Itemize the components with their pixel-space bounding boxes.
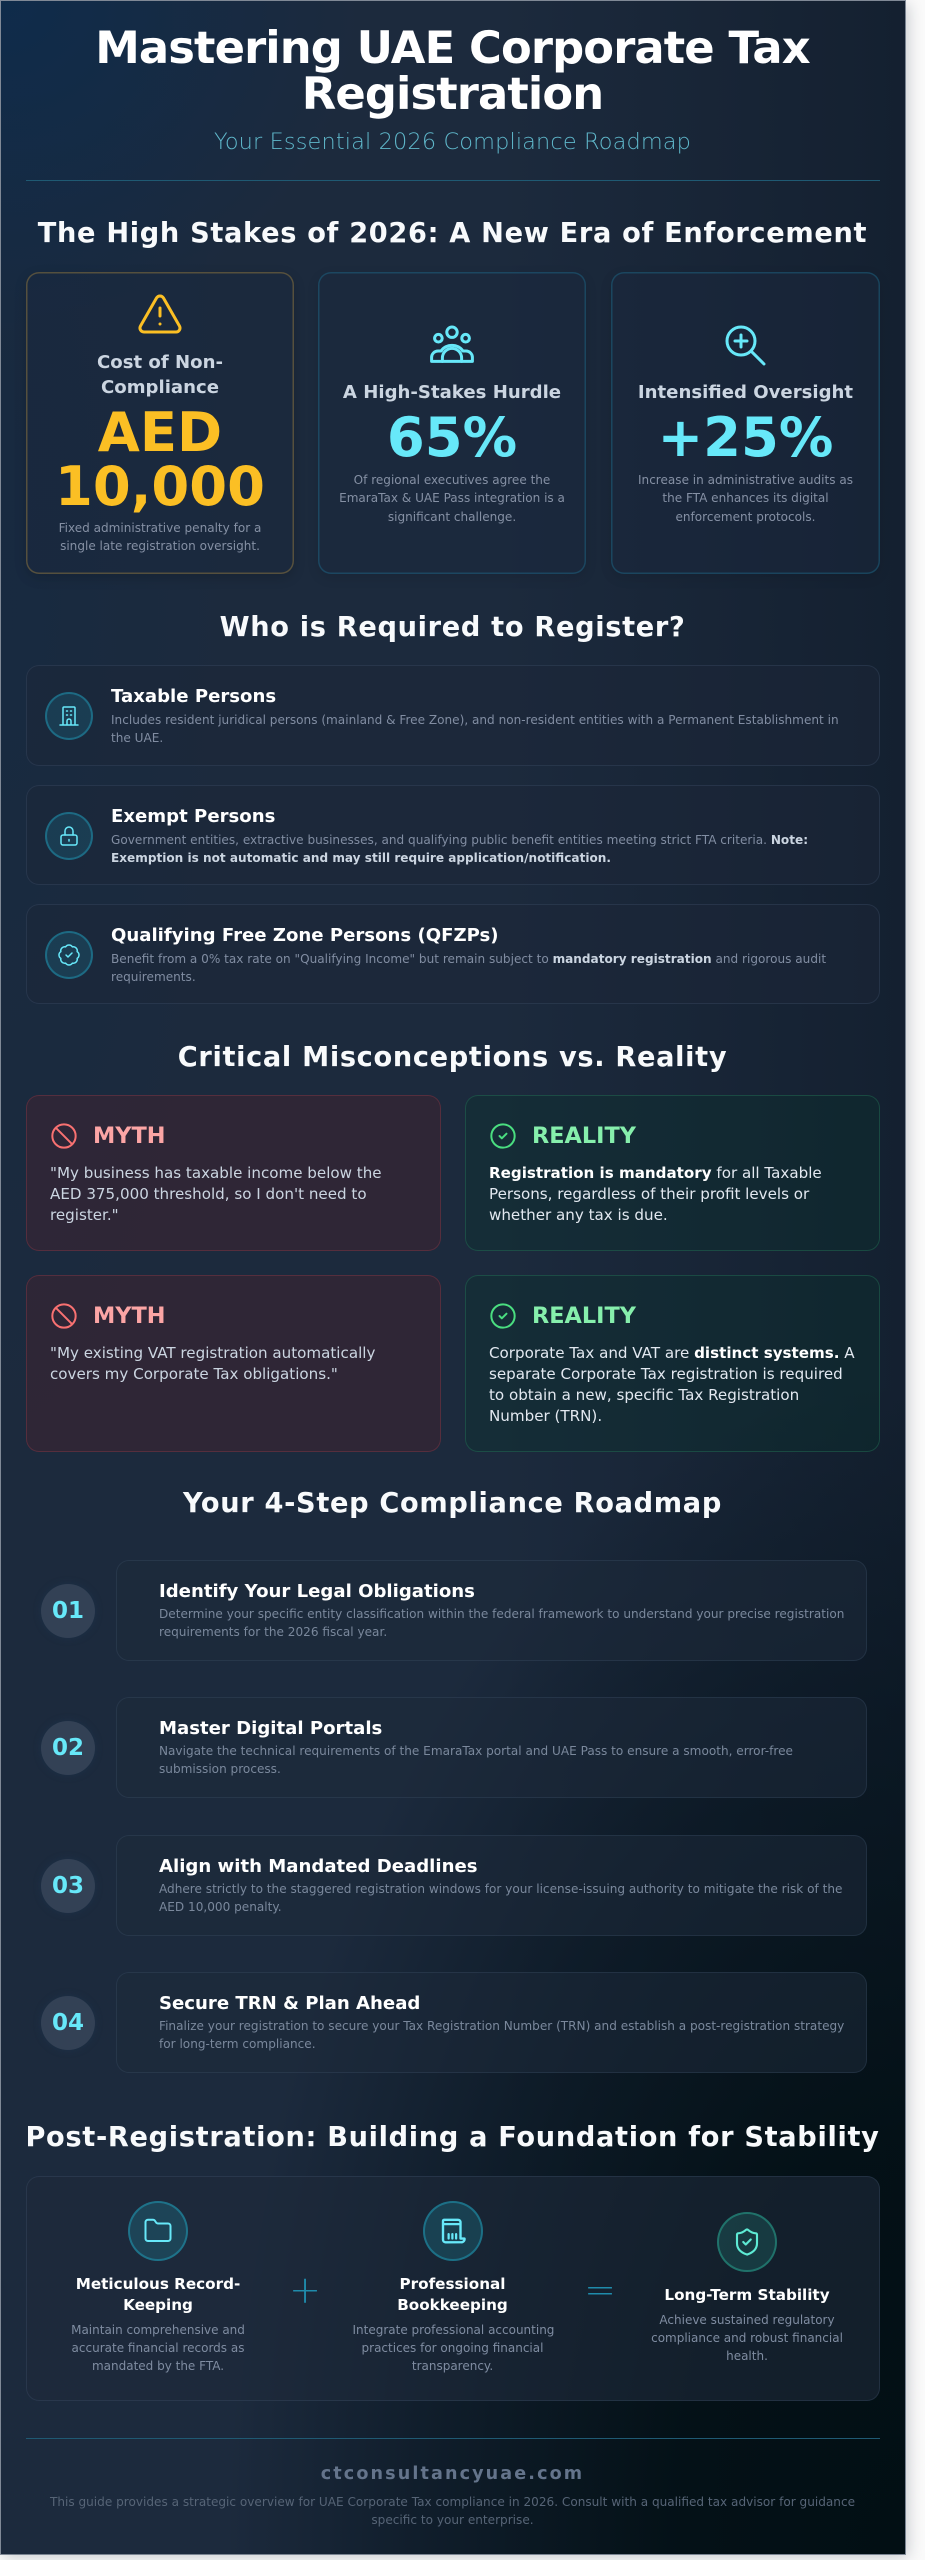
reality label: REALITY [532, 1123, 636, 1149]
reality text: Number (TRN). [489, 1407, 602, 1425]
panel: cost of non-compliance [26, 272, 294, 574]
panel: reality 1 [465, 1095, 880, 1251]
panel: myth 2 [26, 1275, 441, 1452]
step number 04: 04 [52, 2010, 84, 2036]
reality text: Persons, regardless of their profit levels or [489, 1185, 809, 1203]
icon: check circle [490, 1123, 516, 1149]
row title: Exempt Persons [111, 806, 275, 826]
item title: Long-Term Stability [664, 2286, 830, 2304]
icon: folder [128, 2201, 188, 2261]
item title: Bookkeeping [397, 2296, 508, 2314]
step number 03: 03 [52, 1873, 84, 1899]
icon: ban [51, 1303, 77, 1329]
icon: check circle [490, 1303, 516, 1329]
icon: ledger [422, 2201, 482, 2261]
item title [76, 2274, 240, 2314]
step number 02: 02 [52, 1735, 84, 1761]
item title [397, 2274, 508, 2314]
equals operator: = [584, 2268, 616, 2312]
myth label: MYTH [93, 1303, 166, 1329]
stat value: +25% [658, 406, 833, 469]
step number 01 [41, 1584, 95, 1638]
row description [111, 833, 808, 865]
step description: Determine your specific entity classification within the federal framework to understand your precise registration [159, 1607, 844, 1621]
row description: Includes resident juridical persons (mainland & Free Zone), and non-resident entities with a Permanent Establishment in [111, 713, 839, 727]
reality text [489, 1164, 822, 1224]
step description [159, 1607, 844, 1639]
plus operator: + [289, 2268, 321, 2312]
step number 01: 01 [52, 1598, 84, 1624]
stat description: single late registration oversight. [60, 539, 260, 553]
stat description [638, 473, 853, 524]
reality text: Registration is mandatory for all Taxable [489, 1164, 822, 1182]
panel: intensified oversight [611, 272, 880, 574]
panel: post-registration equation [26, 2176, 880, 2401]
title: Mastering UAE Corporate Tax [95, 21, 810, 74]
item: stability [651, 2212, 843, 2363]
myth text: "My existing VAT registration automatically [50, 1344, 375, 1362]
stat description: Increase in administrative audits as [638, 473, 853, 487]
panel: taxable persons [26, 665, 880, 766]
step description: for long-term compliance. [159, 2037, 316, 2051]
panel: reality 2 [465, 1275, 880, 1452]
row description: Benefit from a 0% tax rate on "Qualifying Income" but remain subject to mandatory registration and rigorous audit [111, 952, 826, 966]
row title: Taxable Persons [111, 686, 276, 706]
stat value: 65% [387, 406, 517, 469]
row title: Qualifying Free Zone Persons (QFZPs) [111, 924, 499, 946]
title [95, 21, 810, 120]
stat label: Intensified Oversight [638, 382, 853, 403]
step title: Master Digital Portals [159, 1718, 382, 1738]
myth text [50, 1344, 375, 1383]
item description [651, 2313, 843, 2363]
reality text: separate Corporate Tax registration is required [489, 1365, 843, 1383]
heading: roadmap: Your 4-Step Compliance Roadmap [183, 1488, 722, 1518]
stat description: enforcement protocols. [676, 510, 815, 524]
reality text [489, 1344, 855, 1425]
icon: ban [51, 1123, 77, 1149]
row description [111, 952, 826, 984]
item description: Maintain comprehensive and [71, 2323, 245, 2337]
step title: Identify Your Legal Obligations [159, 1580, 475, 1602]
footer: disclaimer: specific to your enterprise. [371, 2513, 534, 2527]
stat description: Of regional executives agree the [354, 473, 550, 487]
myth label: MYTH [93, 1123, 166, 1149]
item description: practices for ongoing financial [362, 2341, 543, 2355]
stat value [55, 400, 265, 518]
icon: building [45, 692, 93, 740]
row description: the UAE. [111, 731, 163, 745]
step description: requirements for the 2026 fiscal year. [159, 1625, 387, 1639]
panel: high-stakes hurdle [318, 272, 586, 574]
item: record-keeping [71, 2201, 245, 2373]
item description: health. [726, 2349, 768, 2363]
stat label: A High-Stakes Hurdle [343, 382, 561, 403]
step description: AED 10,000 penalty. [159, 1900, 282, 1914]
stat description: EmaraTax & UAE Pass integration is a [339, 491, 565, 505]
subtitle: Your Essential 2026 Compliance Roadmap [214, 129, 691, 155]
step card 2 [116, 1697, 867, 1798]
icon: shield check [717, 2212, 777, 2272]
heading: post-registration: Post-Registration: Building a Foundation for Stability [25, 2122, 880, 2152]
item description: accurate financial records as [72, 2341, 244, 2355]
footer: website: ctconsultancyuae.com [321, 2464, 584, 2484]
row description: Exemption is not automatic and may still require application/notification. [111, 851, 611, 865]
item title: Professional [400, 2274, 505, 2292]
step card 3 [116, 1835, 867, 1936]
step card 4 [116, 1972, 867, 2073]
item description [71, 2323, 245, 2373]
heading: high stakes: The High Stakes of 2026: A New Era of Enforcement [38, 218, 867, 248]
stat label [97, 352, 223, 398]
step card 1 [116, 1560, 867, 1661]
item title: Keeping [123, 2296, 193, 2314]
step number 02 [41, 1721, 95, 1775]
step title: Align with Mandated Deadlines [159, 1856, 478, 1876]
title: Registration [302, 67, 603, 120]
reality text: Corporate Tax and VAT are distinct systems. A [489, 1344, 855, 1362]
item description: transparency. [412, 2359, 493, 2373]
panel: qualifying free zone persons [26, 904, 880, 1004]
stat label: Compliance [101, 376, 219, 398]
icon: people group [430, 326, 474, 363]
myth text [50, 1164, 382, 1224]
step description: Navigate the technical requirements of the EmaraTax portal and UAE Pass to ensure a smooth, error-free [159, 1744, 793, 1758]
stat label: Cost of Non- [97, 352, 223, 372]
step number 04 [41, 1996, 95, 2050]
icon: warning triangle [138, 294, 182, 334]
icon: magnifier [726, 326, 766, 366]
row description: requirements. [111, 970, 196, 984]
myth text: register." [50, 1206, 119, 1224]
stat value: 10,000 [55, 454, 265, 518]
step description: Adhere strictly to the staggered registration windows for your license-issuing authority to mitigate the risk of the [159, 1882, 842, 1896]
footer: disclaimer: This guide provides a strategic overview for UAE Corporate Tax compliance in 2026. Consult with a qualified tax advisor for guidance [50, 2495, 855, 2509]
step description: submission process. [159, 1762, 281, 1776]
stat description [59, 521, 261, 553]
stat description: Fixed administrative penalty for a [59, 521, 261, 535]
item description: mandated by the FTA. [92, 2359, 224, 2373]
step description: Finalize your registration to secure your Tax Registration Number (TRN) and establish a post-registration strategy [159, 2019, 844, 2033]
reality text: to obtain a new, specific Tax Registration [489, 1386, 799, 1404]
panel: exempt persons [26, 785, 880, 885]
myth text: AED 375,000 threshold, so I don't need to [50, 1185, 367, 1203]
step number 03 [41, 1859, 95, 1913]
step description [159, 1882, 842, 1914]
stat description: significant challenge. [388, 510, 516, 524]
stat description [339, 473, 565, 524]
heading: who must register: Who is Required to Register? [220, 612, 685, 642]
icon: badge check [45, 931, 93, 979]
step description [159, 1744, 793, 1776]
item description: Achieve sustained regulatory [659, 2313, 835, 2327]
heading: misconceptions: Critical Misconceptions vs. Reality [178, 1042, 727, 1072]
myth text: covers my Corporate Tax obligations." [50, 1365, 338, 1383]
row description: Government entities, extractive businesses, and qualifying public benefit entities meeting strict FTA criteria. Note: [111, 833, 808, 847]
item title: Meticulous Record- [76, 2274, 240, 2292]
step description [159, 2019, 844, 2051]
item: bookkeeping [352, 2201, 554, 2373]
row description [111, 713, 839, 745]
footer: disclaimer [50, 2495, 855, 2527]
item description: compliance and robust financial [651, 2331, 843, 2345]
item description [352, 2323, 554, 2373]
step title: Secure TRN & Plan Ahead [159, 1992, 420, 2014]
item description: Integrate professional accounting [352, 2323, 554, 2337]
icon: lock [45, 812, 93, 860]
reality text: whether any tax is due. [489, 1206, 668, 1224]
reality label: REALITY [532, 1303, 636, 1329]
panel: myth 1 [26, 1095, 441, 1251]
myth text: "My business has taxable income below the [50, 1164, 382, 1182]
stat value: AED [98, 400, 222, 464]
stat description: the FTA enhances its digital [662, 491, 829, 505]
